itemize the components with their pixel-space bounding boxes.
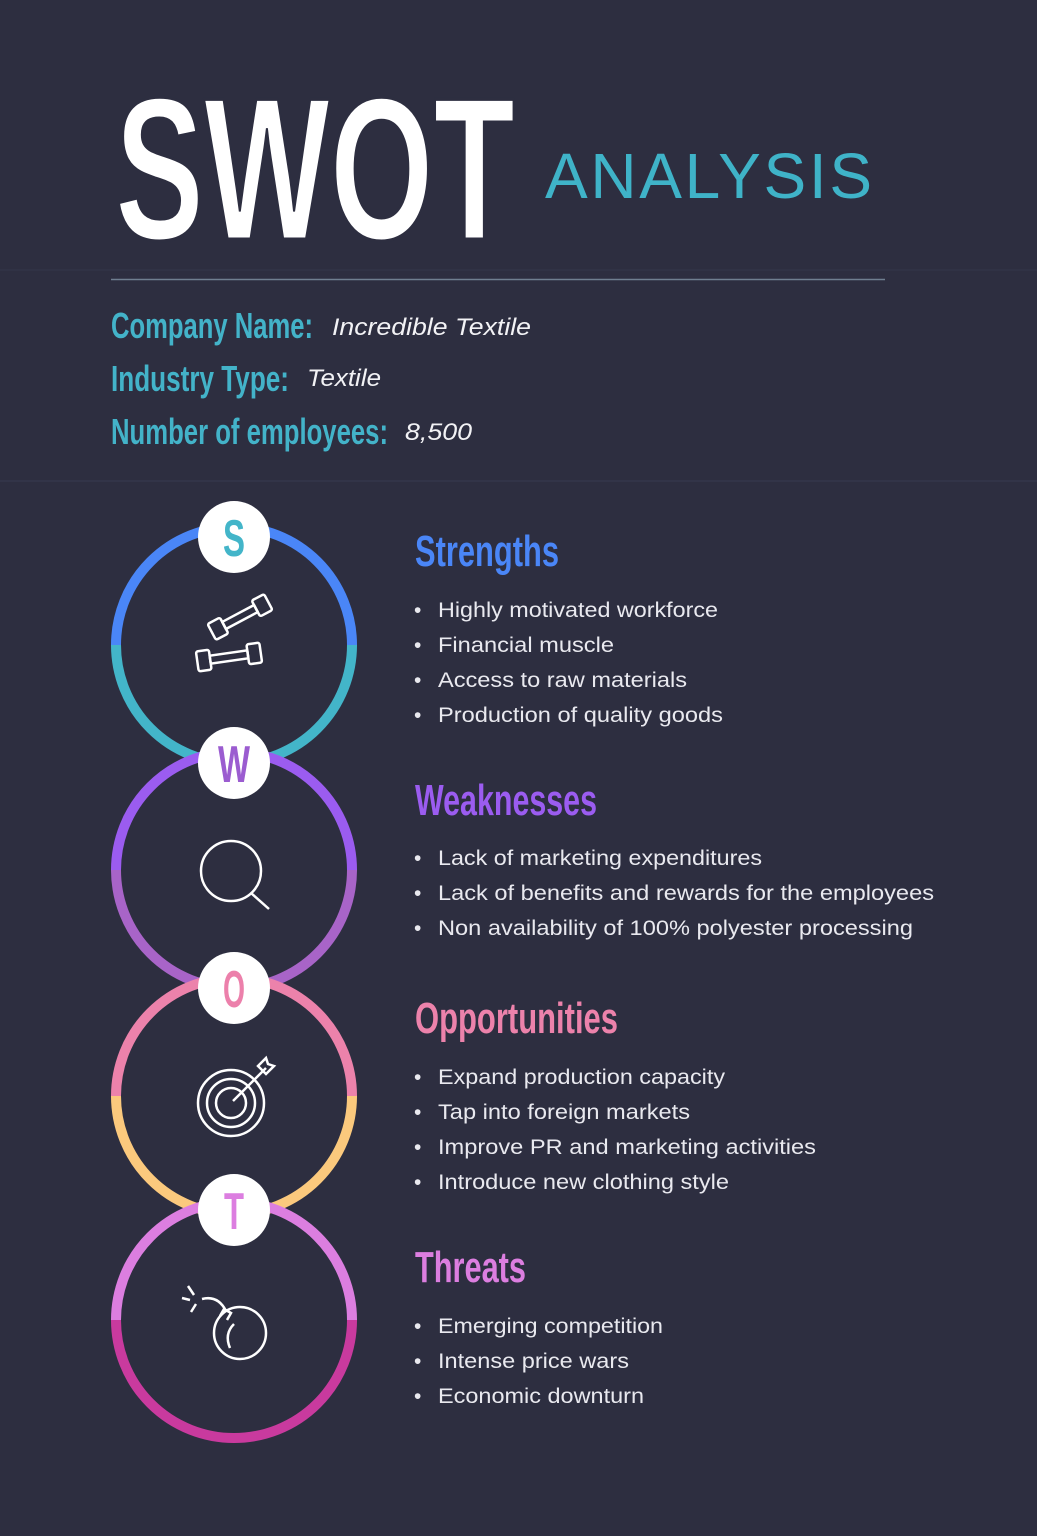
rings xyxy=(116,527,352,1438)
badges: T xyxy=(224,1183,244,1241)
section: threats xyxy=(414,1243,663,1408)
section: opportunities: Expand production capacity xyxy=(438,1066,726,1089)
badges xyxy=(198,501,270,1246)
company info xyxy=(111,305,531,452)
company info: Industry Type: xyxy=(111,358,289,399)
section: threats: Emerging competition xyxy=(438,1315,663,1338)
section: opportunities xyxy=(414,994,816,1194)
section: strengths: Strengths xyxy=(415,527,559,576)
section: weaknesses: Non availability of 100% polyester processing xyxy=(438,917,913,940)
section: opportunities: Opportunities xyxy=(415,994,618,1043)
badges: W xyxy=(218,736,251,794)
badges: O xyxy=(223,961,245,1019)
company info: Textile xyxy=(307,365,381,392)
section: weaknesses xyxy=(414,776,934,940)
section: strengths: • xyxy=(414,669,421,692)
company info: Incredible Textile xyxy=(332,314,531,341)
section: threats: Economic downturn xyxy=(438,1385,644,1408)
icon: bomb xyxy=(182,1286,266,1359)
section: strengths: Access to raw materials xyxy=(438,669,687,692)
icon: target xyxy=(198,1058,274,1136)
company info: Number of employees: xyxy=(111,411,388,452)
section: opportunities: • xyxy=(414,1171,421,1194)
section: threats: • xyxy=(414,1385,421,1408)
section: strengths: • xyxy=(414,634,421,657)
section: opportunities: • xyxy=(414,1136,421,1159)
section: opportunities: Tap into foreign markets xyxy=(438,1101,690,1124)
section: threats: Intense price wars xyxy=(438,1350,629,1373)
company info: 8,500 xyxy=(405,419,473,446)
badges: S xyxy=(223,510,245,568)
company info: Company Name: xyxy=(111,305,313,346)
section: opportunities: • xyxy=(414,1066,421,1089)
section: weaknesses: Weaknesses xyxy=(415,776,597,825)
section: strengths: • xyxy=(414,704,421,727)
section: weaknesses: • xyxy=(414,882,421,905)
section: opportunities: Introduce new clothing style xyxy=(438,1171,729,1194)
subtitle: ANALYSIS xyxy=(545,140,872,212)
section: strengths: Production of quality goods xyxy=(438,704,723,727)
section: opportunities: Improve PR and marketing activities xyxy=(438,1136,816,1159)
section: strengths: Financial muscle xyxy=(438,634,614,657)
section: threats: Threats xyxy=(415,1243,526,1292)
icon: dumbbells xyxy=(196,594,272,671)
section: weaknesses: Lack of benefits and rewards for the employees xyxy=(438,882,934,905)
section: weaknesses: Lack of marketing expenditures xyxy=(438,847,762,870)
section: threats: • xyxy=(414,1350,421,1373)
section: weaknesses: • xyxy=(414,917,421,940)
section: strengths xyxy=(414,527,723,727)
icon: magnifier xyxy=(201,841,269,909)
section: threats: • xyxy=(414,1315,421,1338)
title: SWOT xyxy=(115,56,515,283)
section: weaknesses: • xyxy=(414,847,421,870)
section: strengths: • xyxy=(414,599,421,622)
section: opportunities: • xyxy=(414,1101,421,1124)
section: strengths: Highly motivated workforce xyxy=(438,599,718,622)
